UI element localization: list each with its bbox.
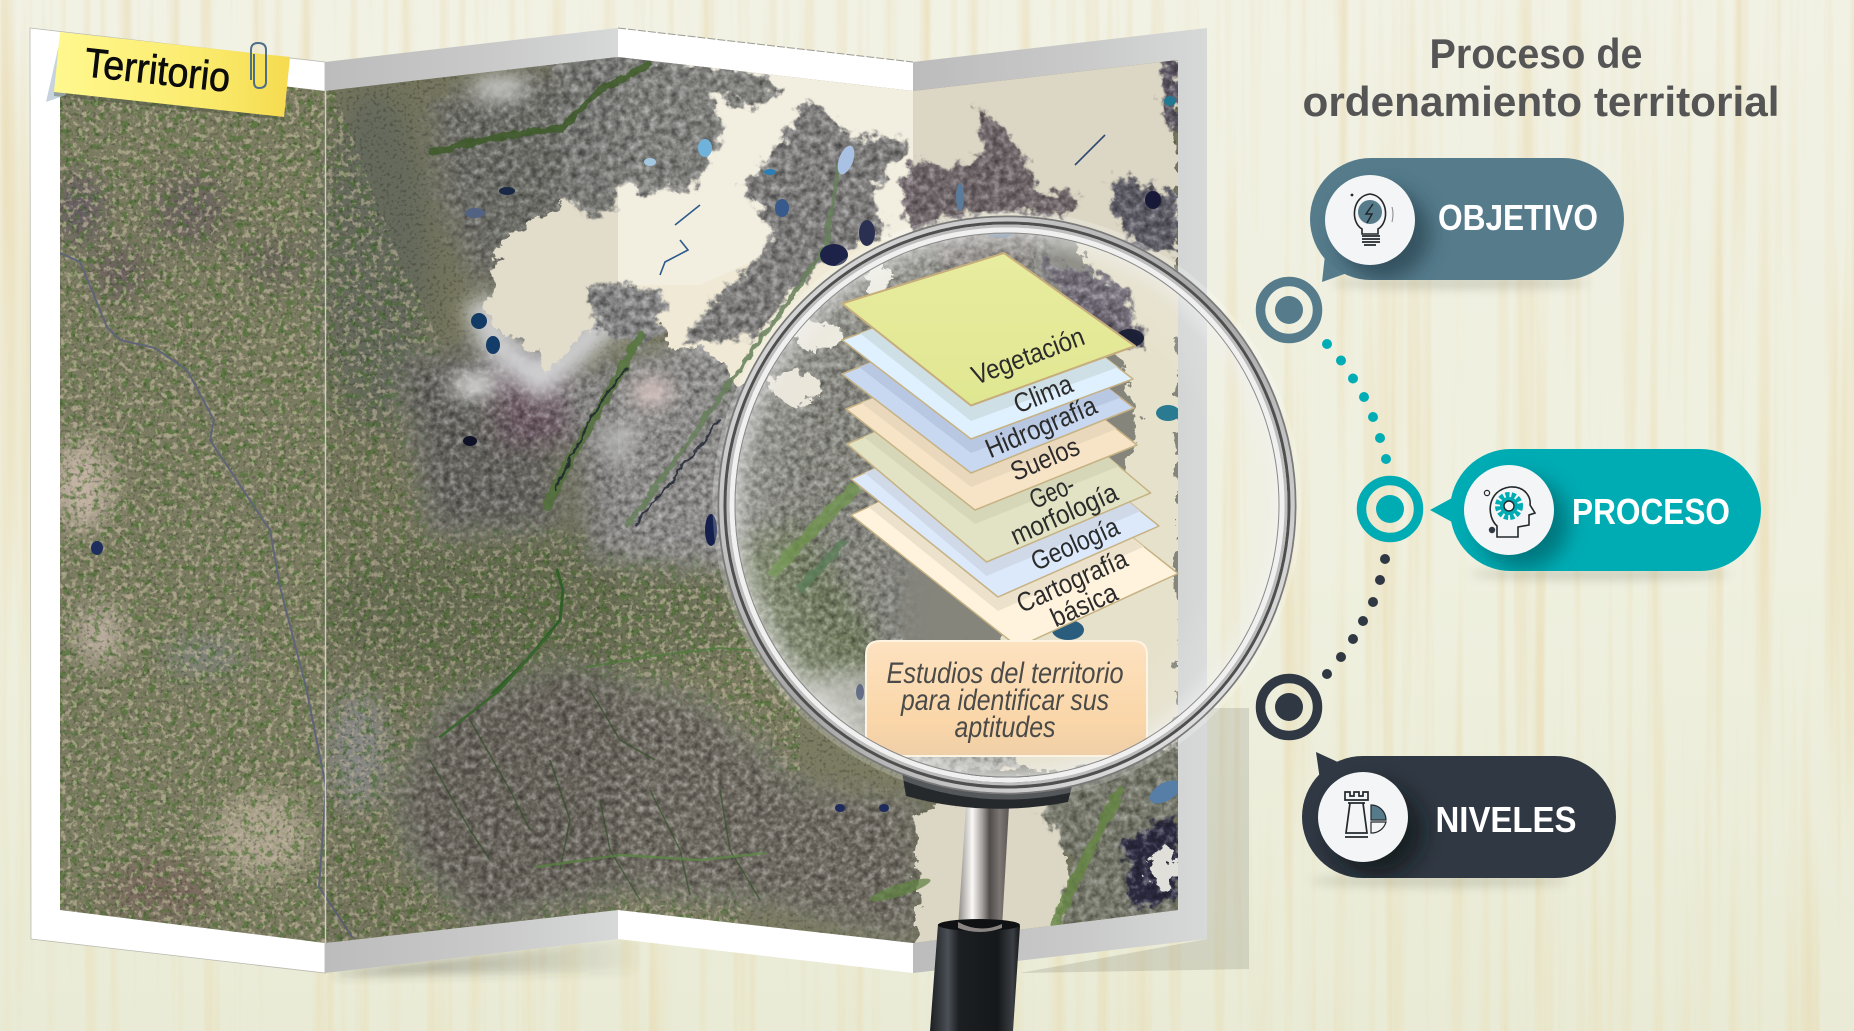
icon: rook and pie chart <box>1318 772 1408 862</box>
callout: estudios del territorio: para identificar sus <box>900 684 1109 717</box>
layer labels: Cartografía <box>1012 543 1133 619</box>
layer labels: Clima <box>1009 368 1078 419</box>
layer: geomorfología <box>846 432 1152 563</box>
note label: Territorio <box>82 39 233 101</box>
icon: light bulb <box>1325 175 1415 265</box>
snow halo around the ice field <box>438 68 716 472</box>
thematic layers <box>842 253 1178 647</box>
label: niveles: NIVELES <box>1436 799 1576 840</box>
ice and salt flats <box>486 50 1178 945</box>
layer labels: morfología <box>1006 477 1123 551</box>
target marker: objetivo <box>1260 282 1318 338</box>
magnifying glass <box>700 200 1299 1031</box>
glass haze <box>735 233 1279 777</box>
label: objetivo: OBJETIVO <box>1438 197 1598 238</box>
title: Proceso de <box>1430 30 1642 77</box>
callout: estudios del territorio: aptitudes <box>954 711 1056 744</box>
target marker: proceso <box>1362 480 1418 538</box>
connector dots: objetivo to proceso <box>1322 339 1391 464</box>
layer labels <box>967 321 1133 633</box>
layer: clima <box>842 268 1135 439</box>
shading of the folded panels <box>325 50 618 950</box>
callout: estudios del territorio: Estudios del territorio <box>886 657 1124 690</box>
layer: cartografía básica <box>850 502 1179 640</box>
label: proceso: PROCESO <box>1572 491 1730 532</box>
brighter ice panel <box>618 50 913 285</box>
layer labels: básica <box>1046 577 1123 633</box>
pill: proceso <box>1430 449 1761 580</box>
layer: suelos <box>845 398 1138 511</box>
vegetation and soil texture <box>60 87 800 943</box>
mountain ranges <box>560 50 1178 930</box>
green valleys and dark shadow lines <box>60 65 1120 937</box>
soft grey highland massifs <box>395 50 920 945</box>
layer labels: Hidrografía <box>981 390 1102 464</box>
fold line <box>324 88 326 945</box>
layer: hidrografía <box>842 294 1134 473</box>
layer labels: Geo- <box>1025 469 1079 515</box>
folded map paper <box>30 28 1207 973</box>
connector dots: proceso to niveles <box>1322 554 1390 679</box>
icon: head with gear <box>1464 465 1554 555</box>
satellite map image <box>54 50 1184 950</box>
lower glass reflection <box>760 690 1254 800</box>
magnifier handle <box>902 772 1074 1031</box>
shadows of the folded map <box>335 708 1249 975</box>
target marker: niveles <box>1260 678 1318 736</box>
snow on far ridge <box>1146 850 1178 886</box>
layer: geología <box>850 468 1160 598</box>
magnifier ring <box>715 213 1299 797</box>
layer labels: Suelos <box>1006 431 1084 487</box>
lakes <box>91 96 1184 812</box>
callout: estudios del territorio <box>866 641 1147 756</box>
pill: niveles <box>1302 752 1616 887</box>
pill: objetivo <box>1310 158 1624 289</box>
layer: vegetación <box>842 253 1135 406</box>
sticky note with title <box>46 32 290 120</box>
layer labels: Geología <box>1026 511 1124 577</box>
lens view <box>736 234 1278 776</box>
title <box>1302 30 1780 125</box>
regional land colours <box>54 90 760 920</box>
title: ordenamiento territorial <box>1302 78 1780 125</box>
fan of ravines <box>430 690 760 900</box>
icon: paperclip <box>251 43 266 88</box>
layer labels: Vegetación <box>967 321 1089 391</box>
